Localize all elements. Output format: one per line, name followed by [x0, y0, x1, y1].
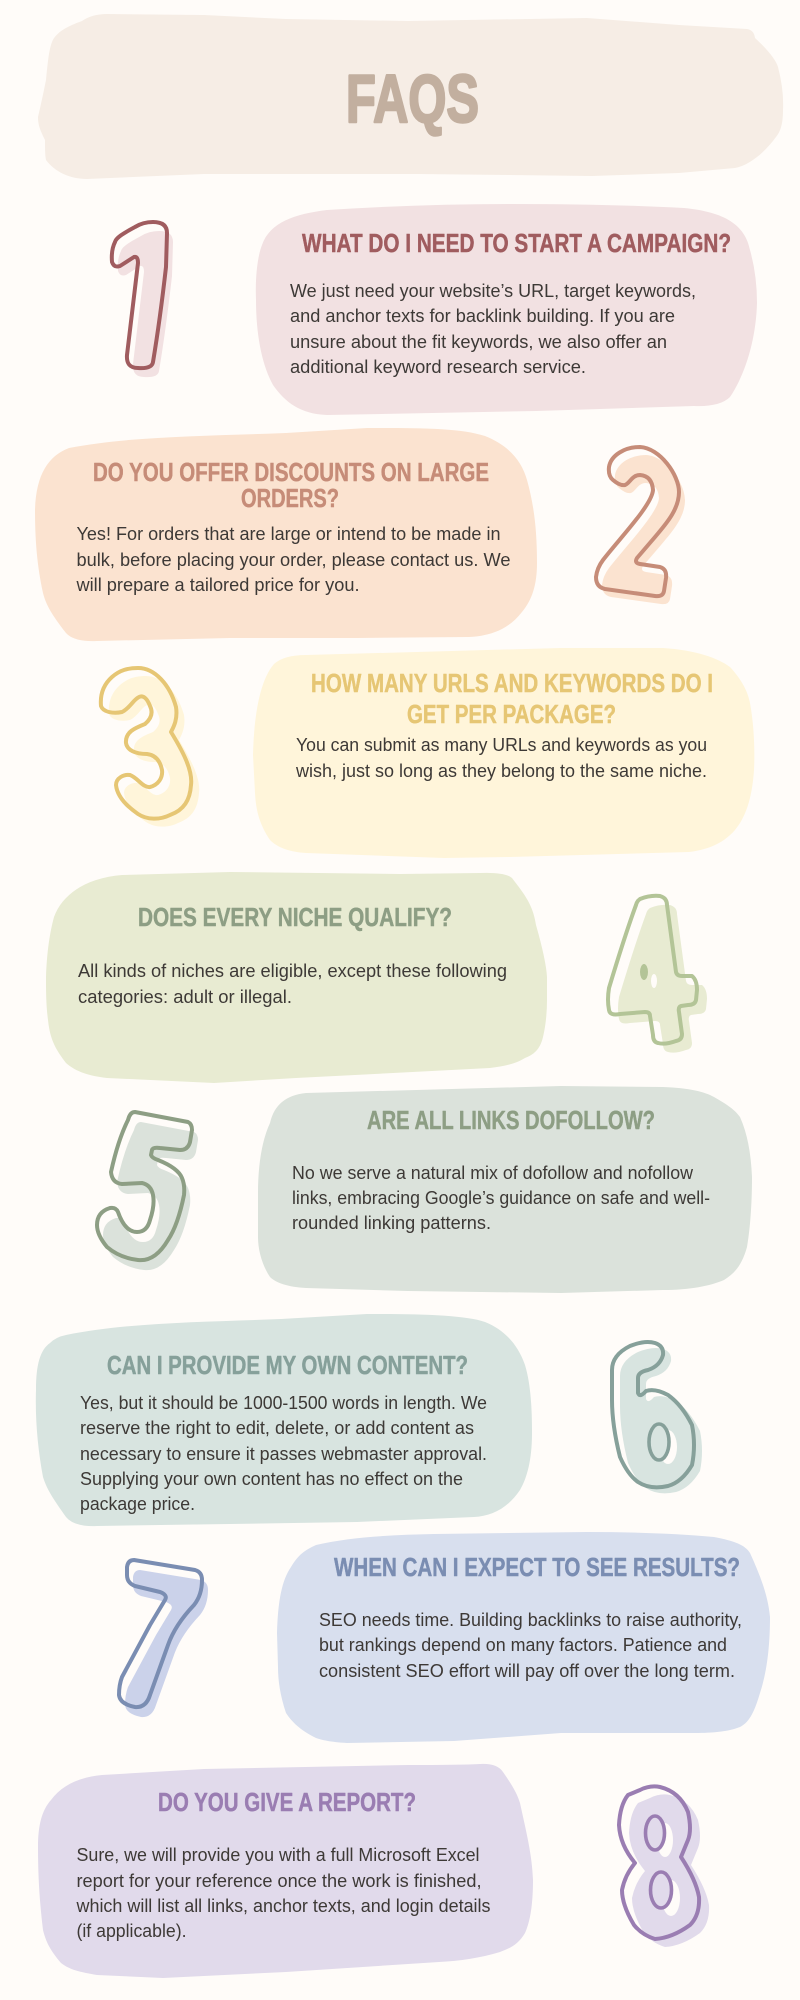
body text [76, 1845, 490, 1941]
panel: do you give a report [38, 1764, 533, 1978]
panel: when can I expect to see results [277, 1532, 770, 1743]
number 3 [101, 668, 199, 827]
number 6 [612, 1342, 702, 1493]
panel: URLs and keywords per package [253, 648, 754, 858]
body text: rounded linking patterns. [292, 1213, 491, 1233]
body text: additional keyword research service. [290, 357, 586, 377]
panel: are all links dofollow [258, 1086, 752, 1293]
body text: but rankings depend on many factors. Patience and [319, 1635, 727, 1655]
body text: No we serve a natural mix of dofollow and nofollow [292, 1163, 694, 1183]
body text [75, 524, 510, 595]
body text: Yes! For orders that are large or intend to be made in [76, 524, 501, 544]
panel: what do I need to start a campaign [256, 204, 757, 415]
heading: DO YOU OFFER DISCOUNTS ON LARGE [93, 457, 489, 487]
title panel [38, 14, 783, 179]
body text: Supplying your own content has no effect on the [80, 1469, 463, 1489]
body text: package price. [80, 1494, 195, 1514]
panel: does every niche qualify [46, 872, 547, 1083]
body text [295, 735, 707, 781]
body text: bulk, before placing your order, please contact us. We [76, 550, 510, 570]
body text: All kinds of niches are eligible, except these following [78, 961, 507, 981]
body text: which will list all links, anchor texts, and login details [76, 1896, 490, 1916]
body text: unsure about the fit keywords, we also offer an [290, 332, 667, 352]
body text: Yes, but it should be 1000-1500 words in length. We [80, 1393, 487, 1413]
heading [93, 457, 489, 513]
number 1 [112, 222, 173, 377]
heading: CAN I PROVIDE MY OWN CONTENT? [107, 1350, 468, 1380]
heading [311, 668, 713, 729]
body text: Sure, we will provide you with a full Microsoft Excel [76, 1845, 480, 1865]
panel: discounts on large orders [35, 428, 537, 641]
heading: GET PER PACKAGE? [407, 699, 616, 729]
heading: ARE ALL LINKS DOFOLLOW? [367, 1105, 655, 1135]
number 8 [619, 1786, 709, 1947]
heading: ORDERS? [241, 483, 339, 513]
body text: and anchor texts for backlink building. If you are [290, 306, 675, 326]
body text: reserve the right to edit, delete, or add content as [80, 1418, 474, 1438]
body text [292, 1163, 710, 1233]
number 2 [596, 447, 685, 604]
body text: You can submit as many URLs and keywords as you [296, 735, 707, 755]
body text: We just need your website’s URL, target keywords, [290, 281, 696, 301]
number 7 [119, 1560, 208, 1717]
body text: will prepare a tailored price for you. [75, 575, 359, 595]
panel: can I provide my own content [36, 1314, 532, 1526]
number 5 [97, 1112, 198, 1270]
body text [78, 961, 507, 1007]
body text [290, 281, 696, 377]
body text: links, embracing Google’s guidance on safe and well- [292, 1188, 710, 1208]
body text: (if applicable). [76, 1921, 186, 1941]
body text: wish, just so long as they belong to the same niche. [295, 761, 707, 781]
number 4 [608, 896, 707, 1053]
body text: report for your reference once the work is finished, [76, 1871, 481, 1891]
body text: categories: adult or illegal. [78, 987, 292, 1007]
heading: DOES EVERY NICHE QUALIFY? [138, 902, 452, 932]
body text: necessary to ensure it passes webmaster approval. [80, 1444, 487, 1464]
body text: consistent SEO effort will pay off over the long term. [319, 1661, 735, 1681]
body text: SEO needs time. Building backlinks to raise authority, [319, 1610, 742, 1630]
body text [80, 1393, 487, 1514]
body text [319, 1610, 742, 1681]
title: FAQS [346, 61, 479, 137]
heading: DO YOU GIVE A REPORT? [158, 1787, 416, 1817]
